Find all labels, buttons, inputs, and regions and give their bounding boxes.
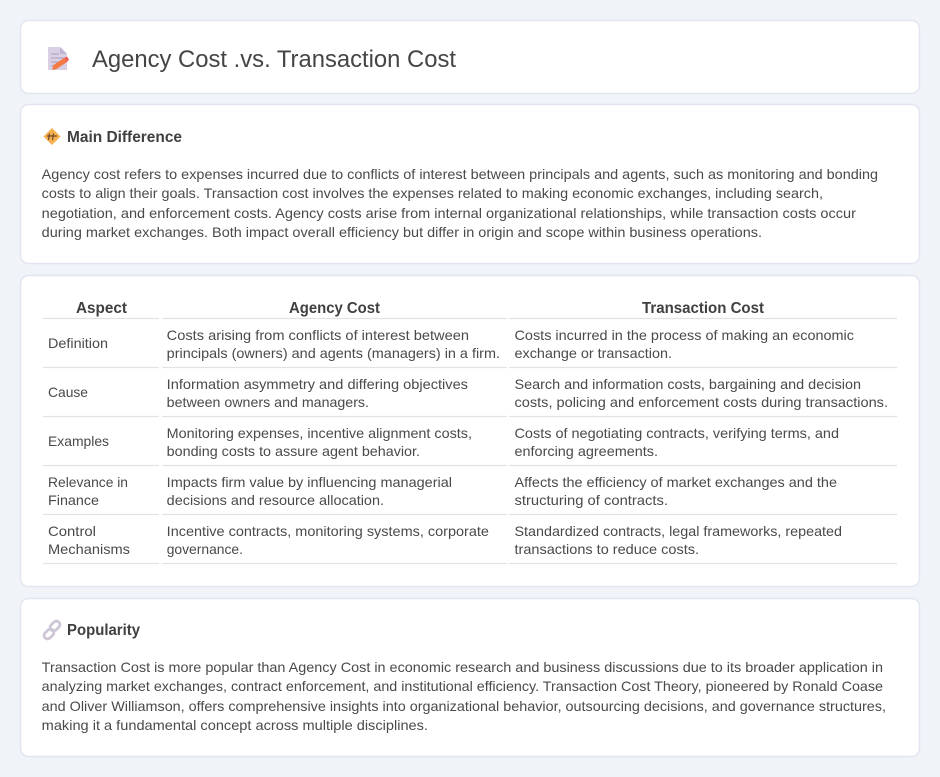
paragraph: main difference: Agency cost refers to expenses incurred due to conflicts of interest between principals and agents, such as monitoring and bonding <box>42 166 878 182</box>
row: examples: Monitoring expenses, incentive alignment costs, <box>167 425 472 441</box>
row: control mechanisms: Standardized contracts, legal frameworks, repeated <box>514 523 842 539</box>
row: cause: Cause <box>48 384 88 400</box>
title: Agency Cost .vs. Transaction Cost <box>92 46 456 73</box>
row: control mechanisms <box>48 523 842 557</box>
panel: main difference <box>20 104 920 264</box>
paragraph: popularity <box>42 659 886 733</box>
table header row: Transaction Cost <box>642 300 765 317</box>
row: examples: Costs of negotiating contracts, verifying terms, and <box>514 425 839 441</box>
row: examples <box>48 425 839 459</box>
row: relevance in finance: Relevance in <box>48 474 128 490</box>
row: cause: costs, policing and enforcement costs during transactions. <box>514 394 888 410</box>
row: cause: Information asymmetry and differing objectives <box>167 376 468 392</box>
paragraph: popularity: and Oliver Williamson, offers comprehensive insights into organizational behavior, outsourcing decisions, and governance structures, <box>42 698 886 714</box>
panel: popularity <box>20 598 920 756</box>
row: examples: enforcing agreements. <box>514 443 658 459</box>
row: relevance in finance: Impacts firm value by influencing managerial <box>167 474 452 490</box>
row: definition: Costs incurred in the process of making an economic <box>514 327 854 343</box>
row: cause: between owners and managers. <box>167 394 369 410</box>
row: relevance in finance: Affects the efficiency of market exchanges and the <box>514 474 837 490</box>
panel: comparison table <box>20 276 920 586</box>
row: relevance in finance: decisions and resource allocation. <box>167 492 384 508</box>
row: definition: Costs arising from conflicts of interest between <box>167 327 469 343</box>
row: relevance in finance: structuring of contracts. <box>514 492 668 508</box>
paragraph: popularity: analyzing market exchanges, contract enforcement, and institutional efficiency. Transaction Cost Theory, pioneered by Ronald Coase <box>42 678 883 694</box>
paragraph: popularity: making it a fundamental concept across multiple disciplines. <box>42 717 428 733</box>
table header row <box>76 300 765 317</box>
row: relevance in finance <box>48 474 837 508</box>
paragraph: main difference: negotiation, and enforcement costs. Agency costs arise from internal organizational relationships, while transaction costs occur <box>42 205 856 221</box>
row: definition: exchange or transaction. <box>514 345 672 361</box>
row: control mechanisms: Incentive contracts, monitoring systems, corporate <box>167 523 489 539</box>
row: cause <box>48 376 888 410</box>
paragraph: main difference: costs to align their goals. Transaction cost involves the expenses related to making economic exchanges, including search, <box>42 185 823 201</box>
icon: chain link <box>43 620 61 640</box>
row: control mechanisms: Control <box>48 523 96 539</box>
paragraph: popularity: Transaction Cost is more popular than Agency Cost in economic research and business discussions due to its broader application in <box>42 659 883 675</box>
icon: orange diamond <box>44 128 60 145</box>
heading: popularity: Popularity <box>67 622 140 639</box>
table header row: Aspect <box>76 300 128 317</box>
table header row: Agency Cost <box>289 300 381 317</box>
panel: title header <box>20 20 920 94</box>
row: control mechanisms: governance. <box>167 541 243 557</box>
paragraph: main difference <box>42 166 878 240</box>
row: examples: bonding costs to assure agent behavior. <box>167 443 420 459</box>
heading: main difference: Main Difference <box>67 129 182 146</box>
icon: document with pencil <box>48 47 69 70</box>
row: definition: Definition <box>48 335 108 351</box>
row: control mechanisms: transactions to reduce costs. <box>514 541 699 557</box>
row: cause: Search and information costs, bargaining and decision <box>514 376 861 392</box>
row: definition <box>48 327 854 361</box>
paragraph: main difference: during market exchanges. Both impact overall efficiency but differ in origin and scope within business operations. <box>42 224 762 240</box>
row: examples: Examples <box>48 433 109 449</box>
row: definition: principals (owners) and agents (managers) in a firm. <box>167 345 500 361</box>
row: relevance in finance: Finance <box>48 492 99 508</box>
row: control mechanisms: Mechanisms <box>48 541 130 557</box>
